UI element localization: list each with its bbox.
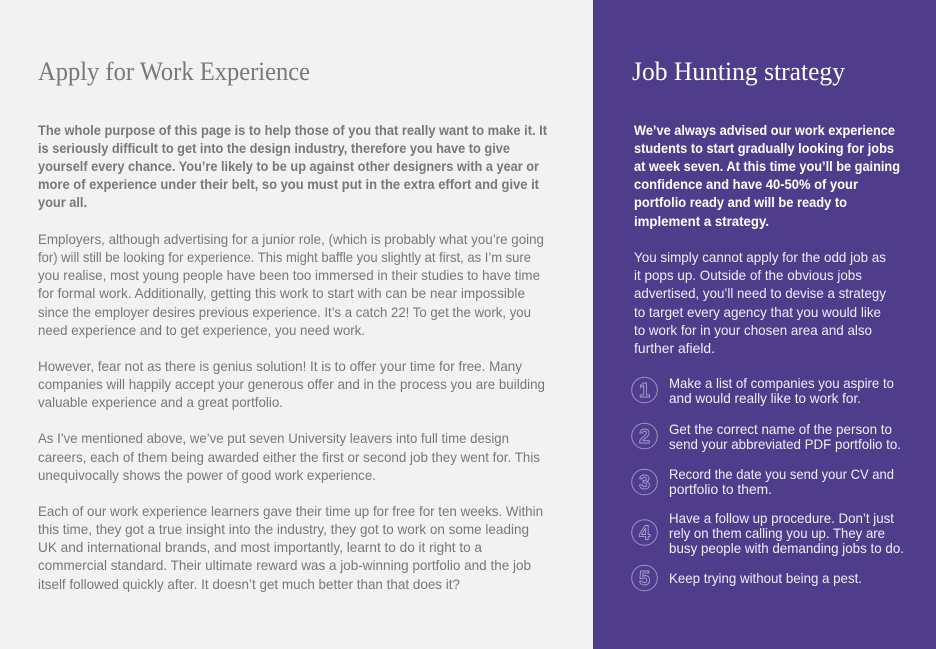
- text block: university leavers paragraph: unequivocally shows the power of good work experience.: [38, 467, 376, 483]
- text block: right intro bold: at week seven. At this time you’ll be gaining: [634, 158, 900, 174]
- icon: number 3: 3: [639, 472, 650, 494]
- text: step 4: [669, 510, 904, 556]
- text: step 2: [669, 421, 901, 452]
- panel: right purple background: [593, 0, 936, 649]
- text block: right strategy paragraph: advertised, you’ll need to devise a strategy: [634, 285, 886, 301]
- heading: Apply for Work Experience: Apply for Work Experience: [38, 56, 310, 86]
- text block: right strategy paragraph: further afield.: [634, 340, 715, 356]
- text: step 1: and would really like to work for.: [669, 390, 861, 406]
- text block: right intro bold: We’ve always advised our work experience: [634, 122, 895, 138]
- list item 4: [632, 510, 904, 556]
- icon: number 1: [632, 377, 657, 403]
- text block: employers paragraph: Employers, although advertising for a junior role, (which is probably what you’re going: [38, 231, 544, 247]
- text: step 1: [669, 375, 894, 406]
- text block: right strategy paragraph: to target every agency that you would like: [634, 304, 881, 320]
- icon: number 3: [632, 469, 657, 495]
- text: step 1: Make a list of companies you aspire to: [669, 375, 894, 391]
- text block: genius solution paragraph: However, fear not as there is genius solution! It is to offer your time for free. Many: [38, 358, 522, 374]
- text block: right strategy paragraph: it pops up. Outside of the obvious jobs: [634, 267, 862, 283]
- text block: left intro bold: is seriously difficult to get into the design industry, therefore you have to give: [38, 140, 510, 156]
- text block: learners paragraph: UK and international brands, and most importantly, learnt to do it right to a: [38, 539, 482, 555]
- text: step 4: busy people with demanding jobs to do.: [669, 540, 904, 556]
- text block: left intro bold: more of experience under their belt, so you must put in the extra effort and give it: [38, 176, 539, 192]
- text block: left intro bold: The whole purpose of this page is to help those of you that really want to make it. It: [38, 122, 547, 138]
- text: step 3: [669, 466, 894, 497]
- text block: right strategy paragraph: You simply cannot apply for the odd job as: [634, 249, 886, 265]
- text: step 2: Get the correct name of the person to: [669, 421, 892, 437]
- text block: right intro bold: [634, 122, 900, 229]
- list item 1: [632, 375, 894, 406]
- text block: university leavers paragraph: careers, each of them being awarded either the first or second job they went for. This: [38, 449, 540, 465]
- text block: genius solution paragraph: valuable experience and a great portfolio.: [38, 394, 283, 410]
- text: step 4: rely on them calling you up. They are: [669, 525, 885, 541]
- text: step 2: send your abbreviated PDF portfolio to.: [669, 436, 901, 452]
- text block: genius solution paragraph: [38, 358, 545, 410]
- icon: number 4: 4: [639, 522, 651, 544]
- icon: number 5: 5: [639, 568, 650, 590]
- text block: employers paragraph: you realise, most young people have been too immersed in their studies to have time: [38, 267, 540, 283]
- heading: Job Hunting strategy: Job Hunting strategy: [632, 56, 846, 86]
- text block: university leavers paragraph: As I’ve mentioned above, we’ve put seven University leavers into full time design: [38, 430, 509, 446]
- list item 3: [632, 466, 894, 497]
- text block: employers paragraph: for) will still be looking for experience. This might baffle you slightly at first, as I’m sure: [38, 249, 531, 265]
- text block: right strategy paragraph: [634, 249, 886, 356]
- text block: left intro bold: [38, 122, 547, 210]
- text block: right intro bold: students to start gradually looking for jobs: [634, 140, 894, 156]
- text: step 5: Keep trying without being a pest.: [669, 570, 862, 586]
- text block: employers paragraph: since the employer desires previous experience. It’s a catch 22! To get the work, you: [38, 304, 531, 320]
- icon: number 5: [632, 565, 657, 591]
- text block: left intro bold: yourself every chance. You’re likely to be up against other designers with a year or: [38, 158, 539, 174]
- text block: left intro bold: your all.: [38, 194, 87, 210]
- text block: right strategy paragraph: to work for in your chosen area and also: [634, 322, 872, 338]
- text block: right intro bold: portfolio ready and will be ready to: [634, 194, 847, 210]
- icon: number 2: [632, 423, 657, 449]
- text block: learners paragraph: commercial standard. Their ultimate reward was a job-winning portfolio and the job: [38, 557, 531, 573]
- text: step 3: portfolio to them.: [669, 481, 772, 497]
- icon: number 1: 1: [639, 380, 650, 402]
- text block: employers paragraph: [38, 231, 544, 338]
- text block: right intro bold: confidence and have 40-50% of your: [634, 176, 859, 192]
- text block: employers paragraph: need experience and to get experience, you need work.: [38, 322, 365, 338]
- text block: learners paragraph: this time, they got a true insight into the industry, they got to work on some leading: [38, 521, 529, 537]
- icon: number 4: [632, 520, 657, 545]
- text block: learners paragraph: [38, 503, 543, 592]
- text block: genius solution paragraph: companies will happily accept your generous offer and in the process you are building: [38, 376, 545, 392]
- text block: learners paragraph: Each of our work experience learners gave their time up for free for ten weeks. Within: [38, 503, 543, 519]
- text block: employers paragraph: for formal work. Additionally, getting this work to start with can be near impossible: [38, 285, 525, 301]
- text block: right intro bold: implement a strategy.: [634, 213, 769, 229]
- list item 5: [632, 565, 862, 591]
- panel: left background: [0, 0, 593, 649]
- text: step 4: Have a follow up procedure. Don’t just: [669, 510, 894, 526]
- text block: learners paragraph: itself followed quickly after. It doesn’t get much better than that does it?: [38, 576, 460, 592]
- icon: number 2: 2: [639, 426, 650, 448]
- list item 2: [632, 421, 901, 452]
- text: step 3: Record the date you send your CV and: [669, 466, 894, 482]
- text block: university leavers paragraph: [38, 430, 540, 483]
